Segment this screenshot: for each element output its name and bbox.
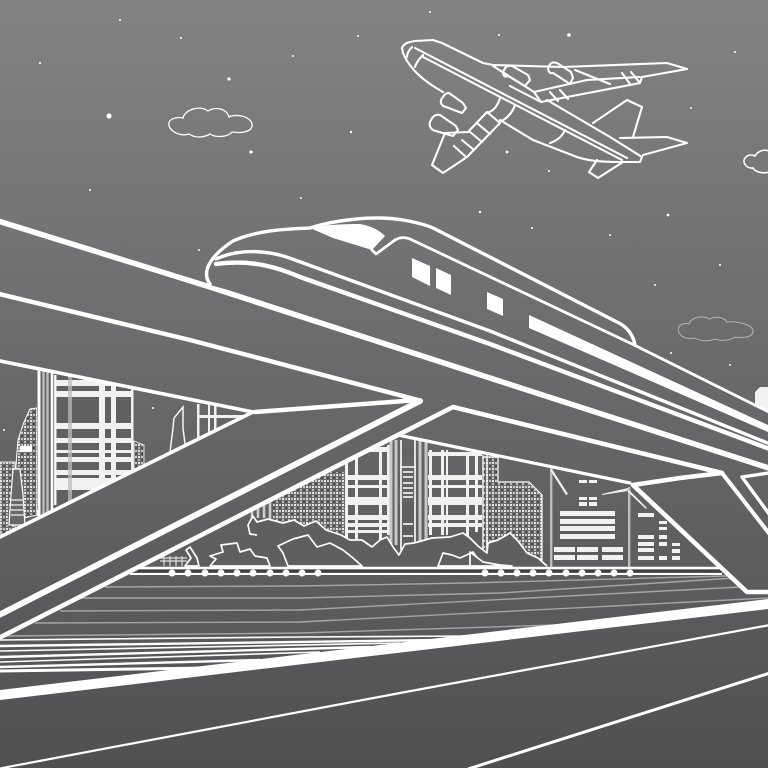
bridge deck fills: [0, 222, 768, 640]
ground lines: [0, 576, 768, 671]
bridge fill: diagonal span: [0, 400, 453, 640]
cloud: left: [169, 108, 252, 137]
building: central tower: [391, 440, 426, 550]
bridge: second edge and tip: [0, 293, 418, 412]
building: left tower with dotted facade: [0, 408, 37, 534]
plane: upper wing: [493, 63, 687, 102]
building: striped slab: [252, 498, 270, 530]
bridge fill: upper deck: [0, 222, 768, 480]
bridge: beam below: [398, 435, 630, 483]
bridge fill: lower deck: [0, 293, 418, 412]
building: right dotted block: [483, 455, 542, 560]
railway: supports left: [168, 570, 322, 576]
train: inner roof line: [372, 238, 768, 415]
plane: lower engines: [430, 93, 466, 136]
building: right bars block: [550, 468, 647, 569]
bridge line work: [0, 220, 768, 640]
bridge: right pier edge: [722, 473, 768, 541]
railway: supports right: [482, 570, 634, 576]
maglev train: [206, 218, 768, 451]
building: distant right edge: [755, 387, 768, 414]
tree: clump near: [470, 552, 512, 566]
train: outer roof line: [207, 218, 635, 345]
building: grid behind diagonal: [197, 404, 247, 440]
train: windows: [412, 258, 768, 432]
plane: vertical tail: [593, 100, 642, 137]
airplane: [402, 40, 687, 178]
plane: lower wing: [432, 112, 500, 173]
bridge: lower diagonal: [0, 407, 768, 640]
train: long window band: [529, 315, 768, 432]
building: middle grid right: [428, 450, 482, 537]
plane: fuselage: [402, 40, 642, 162]
bridge fill: right pier: [633, 473, 768, 592]
train: lower body stripe: [216, 263, 768, 451]
building: far right bars: [638, 513, 680, 560]
tree: clump right: [438, 552, 492, 566]
building: spire: [170, 407, 186, 452]
plane: horizontal tail: [589, 137, 687, 178]
road lane line: [0, 625, 768, 768]
trees: [185, 516, 547, 566]
cloud: faint: [678, 317, 753, 341]
railway: [130, 568, 722, 576]
train: upper body stripe: [216, 252, 768, 446]
plane: stripes: [407, 47, 627, 160]
stars: [3, 11, 736, 431]
tree: clump far left: [185, 547, 199, 566]
road surface lower: [0, 608, 768, 768]
train: windscreen: [310, 224, 385, 250]
bridge: underside: [0, 360, 253, 537]
building: left grid tower: [37, 368, 144, 520]
road lower lane line: [468, 673, 768, 768]
bridge: far pier: [742, 472, 768, 522]
tree: rear hedge: [248, 516, 547, 566]
tree: clump middle: [278, 535, 362, 566]
building: middle dotted block: [273, 472, 346, 534]
road edge: [0, 599, 768, 700]
building: middle grid left: [345, 445, 390, 542]
city skyline: [0, 368, 768, 569]
bridge: long diagonal: [0, 401, 420, 617]
plane: upper engines: [503, 62, 573, 86]
tree: clump left: [210, 543, 270, 566]
bridge fill: right beam: [398, 407, 722, 483]
building: small grid near rail: [160, 556, 187, 566]
cloud: right edge: [744, 150, 768, 173]
train: body fill: [206, 218, 768, 450]
bridge: top edge: [0, 220, 768, 470]
